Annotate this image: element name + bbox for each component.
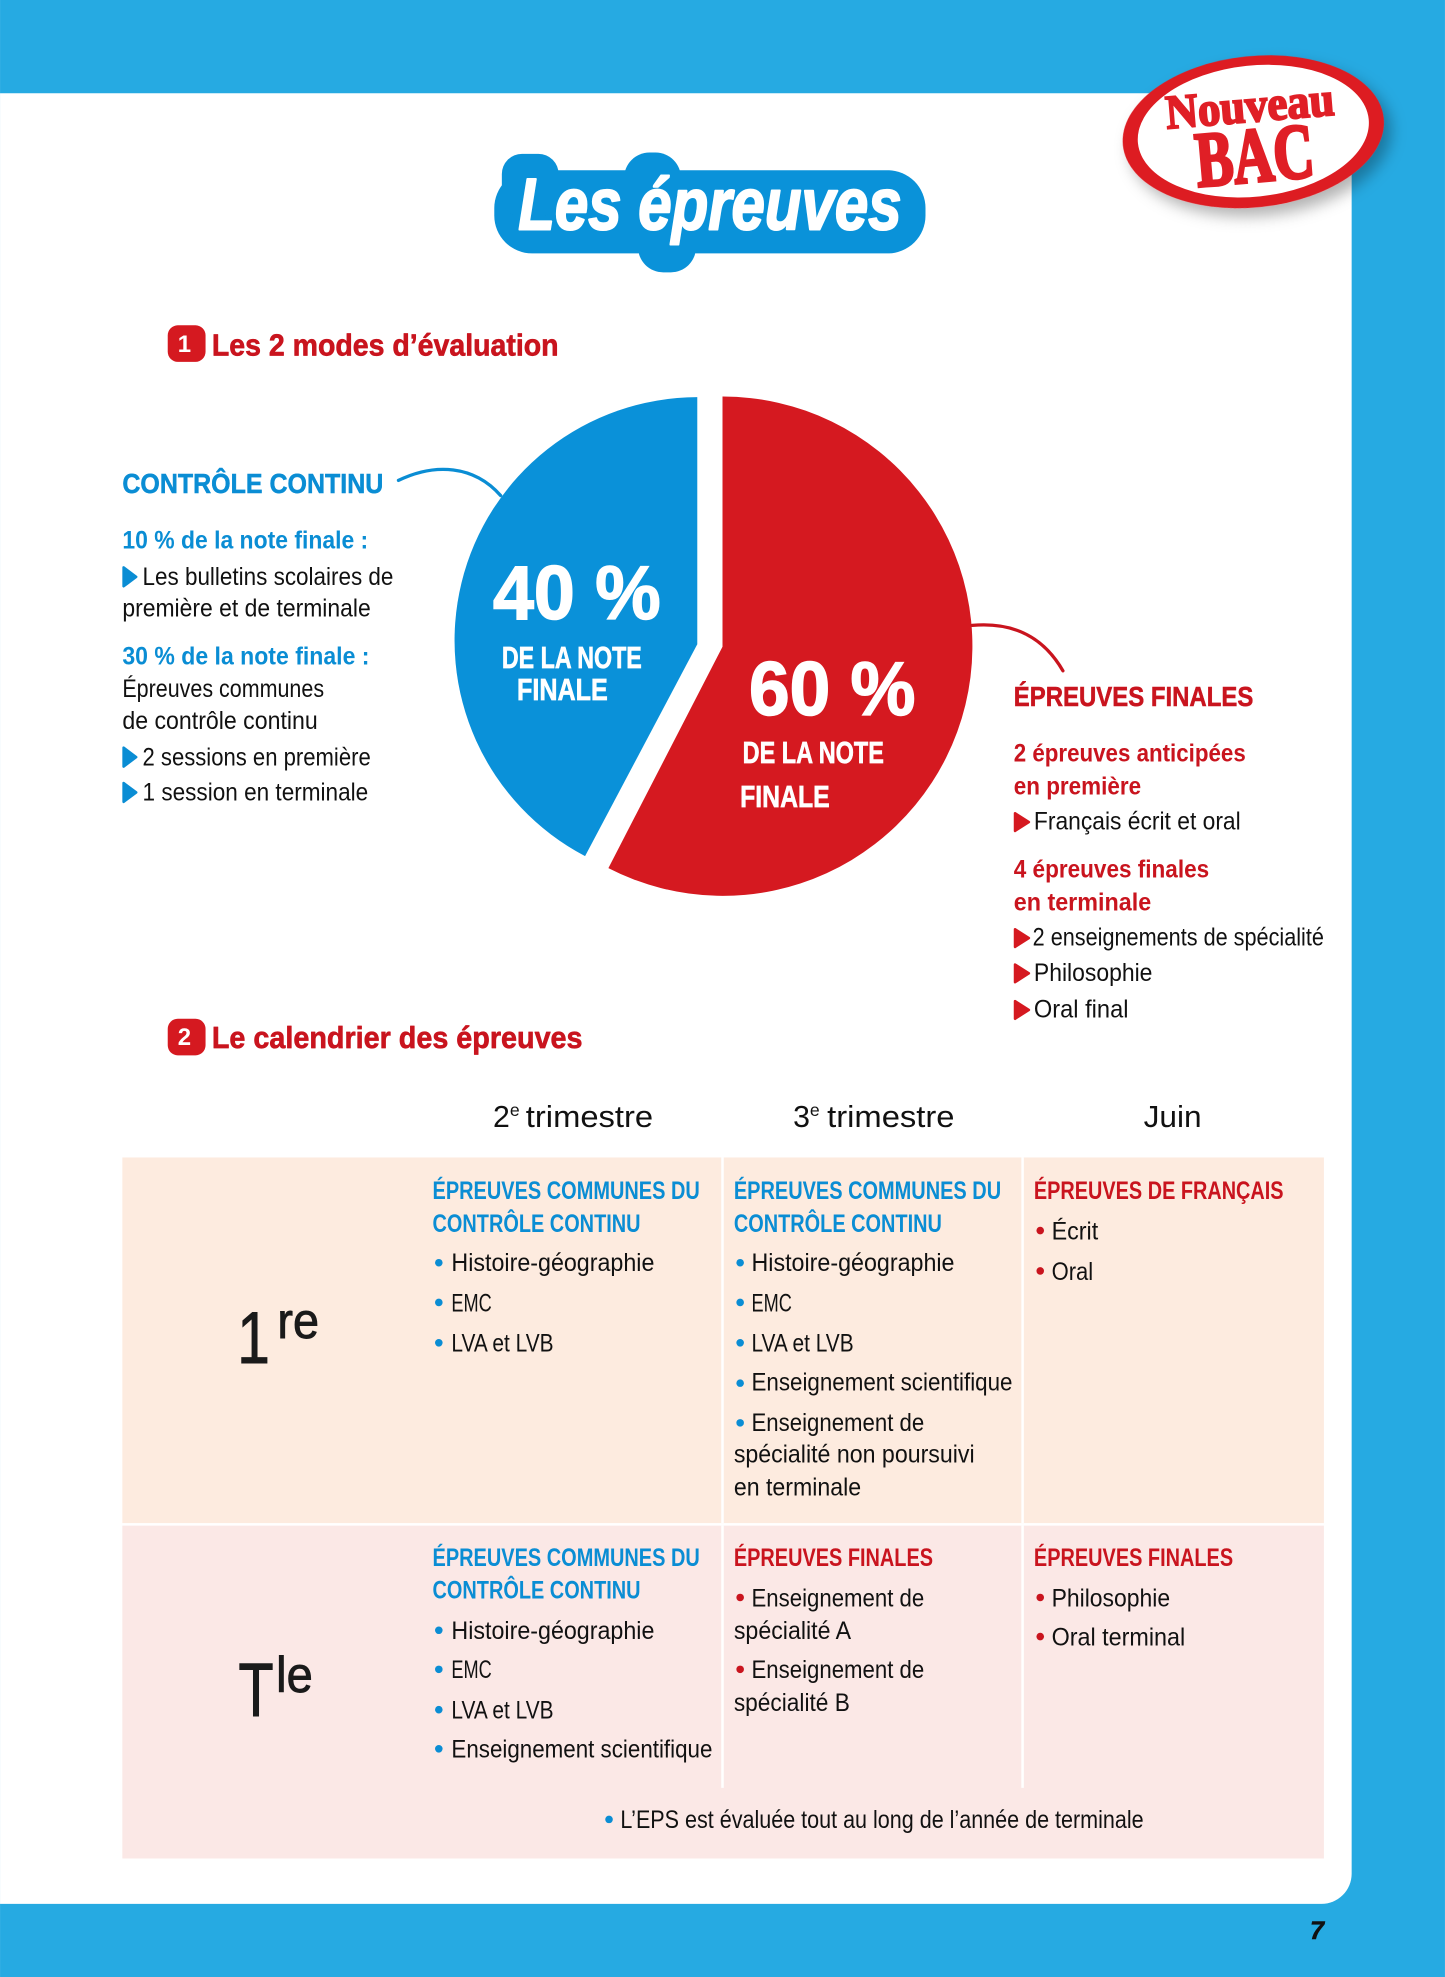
text block: épreuves finales: Français écrit et oral [1034, 808, 1241, 836]
badge: Nouveau BAC: BAC [1192, 107, 1317, 204]
text block: contrôle continu: 10 % de la note finale : [122, 526, 368, 554]
text block: épreuves finales [1014, 681, 1324, 1023]
label: 40 % de la note finale: 40 % [493, 552, 661, 636]
text block: épreuves finales: Philosophie [1034, 959, 1152, 987]
row label: Tle: T [238, 1649, 274, 1733]
text block: contrôle continu: première et de terminale [122, 595, 371, 623]
cell: 3e trimestre, 1re: Enseignement de [751, 1409, 924, 1437]
text block: épreuves finales: 4 épreuves finales [1014, 856, 1209, 884]
text block: épreuves finales: ÉPREUVES FINALES [1014, 681, 1253, 712]
cell: 2e trimestre, Tle: ÉPREUVES COMMUNES DU [433, 1543, 700, 1572]
badge: Nouveau BAC [1115, 43, 1392, 221]
section 2 heading: Le calendrier des épreuves [212, 1022, 583, 1055]
text block: contrôle continu: CONTRÔLE CONTINU [122, 468, 383, 499]
cell: 2e trimestre, Tle: LVA et LVB [451, 1697, 554, 1725]
column headers: trimestre [827, 1101, 954, 1134]
cell: 2e trimestre, Tle: Histoire-géographie [451, 1617, 654, 1645]
cell: 2e trimestre, 1re: EMC [451, 1289, 492, 1317]
cell: 2e trimestre, Tle: EMC [451, 1656, 492, 1684]
title: Les épreuves [518, 164, 902, 245]
cell: 3e trimestre, 1re: LVA et LVB [751, 1330, 854, 1358]
text block: contrôle continu: Les bulletins scolaires de [143, 563, 393, 591]
note: EPS: L’EPS est évaluée tout au long de l’année de terminale [620, 1806, 1144, 1834]
cell: juin, 1re: Écrit [1052, 1216, 1098, 1245]
cell: 2e trimestre, 1re: Histoire-géographie [451, 1249, 654, 1277]
connector: épreuves finales [972, 625, 1063, 671]
cell: 3e trimestre, 1re: Enseignement scientifique [751, 1369, 1012, 1397]
section 2 heading: 2 [178, 1024, 191, 1051]
cell: 2e trimestre, Tle: Enseignement scientifique [451, 1736, 712, 1764]
label: 60 % de la note finale: FINALE [740, 781, 830, 814]
row label: 1re: 1 [237, 1298, 270, 1379]
cell: juin, 1re: Oral [1052, 1258, 1093, 1286]
text block: épreuves finales: 2 épreuves anticipées [1014, 740, 1246, 768]
cell: juin, Tle [1034, 1543, 1233, 1651]
label: 60 % de la note finale [740, 648, 915, 814]
title [494, 153, 925, 272]
row: Tle [122, 1526, 1324, 1858]
cell: 2e trimestre, 1re: ÉPREUVES COMMUNES DU [433, 1176, 700, 1205]
badge: Nouveau BAC: Nouveau [1164, 73, 1336, 140]
cell: 2e trimestre, Tle [433, 1543, 712, 1764]
pie chart [455, 397, 972, 896]
cell: 3e trimestre, 1re: CONTRÔLE CONTINU [734, 1208, 942, 1238]
text block: épreuves finales: en première [1014, 772, 1141, 800]
cell: juin, Tle: ÉPREUVES FINALES [1034, 1543, 1233, 1572]
cell: 2e trimestre, 1re [433, 1176, 700, 1358]
column headers: 3 [793, 1101, 810, 1134]
cell: 3e trimestre, Tle: spécialité B [734, 1689, 850, 1717]
cell: 3e trimestre, Tle: Enseignement de [751, 1584, 924, 1612]
label: 60 % de la note finale: 60 % [749, 648, 915, 732]
row label: 1re [237, 1292, 319, 1379]
column headers [493, 1100, 1202, 1134]
cell: 2e trimestre, 1re: LVA et LVB [451, 1330, 554, 1358]
text block: contrôle continu: de contrôle continu [122, 707, 318, 735]
connector: contrôle continu [398, 469, 501, 496]
cell: juin, 1re: ÉPREUVES DE FRANÇAIS [1034, 1176, 1284, 1205]
row: 1re [122, 1157, 1324, 1523]
text block: épreuves finales: en terminale [1014, 888, 1151, 916]
cell: 2e trimestre, 1re: CONTRÔLE CONTINU [433, 1208, 641, 1238]
slice: 60 % [608, 397, 972, 896]
column headers: 2 [493, 1101, 510, 1134]
row label: 1re: re [277, 1292, 319, 1349]
text block: contrôle continu [122, 468, 393, 807]
text block: contrôle continu: 30 % de la note finale : [122, 642, 369, 670]
column headers: e [510, 1100, 520, 1120]
column headers: Juin [1144, 1101, 1202, 1134]
row label: Tle [238, 1646, 313, 1733]
cell: 3e trimestre, 1re: EMC [751, 1289, 792, 1317]
column headers: trimestre [526, 1101, 653, 1134]
cell: 3e trimestre, 1re: spécialité non poursuivi [734, 1441, 975, 1469]
slice: 40 % [455, 397, 697, 856]
cell: 3e trimestre, Tle: spécialité A [734, 1617, 851, 1645]
text block: épreuves finales: Oral final [1034, 995, 1128, 1023]
cell: 3e trimestre, 1re [734, 1176, 1012, 1501]
cell: 3e trimestre, 1re: en terminale [734, 1473, 861, 1501]
cell: 3e trimestre, Tle: Enseignement de [751, 1656, 924, 1684]
label: 40 % de la note finale: DE LA NOTE [502, 642, 642, 675]
cell: juin, Tle: Oral terminal [1052, 1623, 1185, 1651]
label: 60 % de la note finale: DE LA NOTE [743, 737, 884, 770]
label: 40 % de la note finale: FINALE [517, 674, 608, 707]
column headers: e [810, 1100, 820, 1120]
cell: 2e trimestre, Tle: CONTRÔLE CONTINU [433, 1575, 641, 1605]
cell: 3e trimestre, 1re: ÉPREUVES COMMUNES DU [734, 1176, 1001, 1205]
section 1 heading: 1 [178, 331, 191, 358]
text block: contrôle continu: 2 sessions en première [143, 743, 371, 771]
page number: 7 [1310, 1917, 1325, 1945]
text block: contrôle continu: 1 session en terminale [143, 779, 368, 807]
cell: 3e trimestre, 1re: Histoire-géographie [751, 1249, 954, 1277]
row label: Tle: le [276, 1646, 313, 1703]
cell: 3e trimestre, Tle: ÉPREUVES FINALES [734, 1543, 933, 1572]
cell: 3e trimestre, Tle [734, 1543, 933, 1717]
text block: épreuves finales: 2 enseignements de spécialité [1033, 924, 1324, 952]
label: 40 % de la note finale [493, 552, 661, 707]
cell: juin, Tle: Philosophie [1052, 1584, 1170, 1612]
cell: juin, 1re [1034, 1176, 1284, 1286]
text block: contrôle continu: Épreuves communes [122, 674, 324, 703]
section 1 heading: Les 2 modes d’évaluation [212, 330, 559, 363]
